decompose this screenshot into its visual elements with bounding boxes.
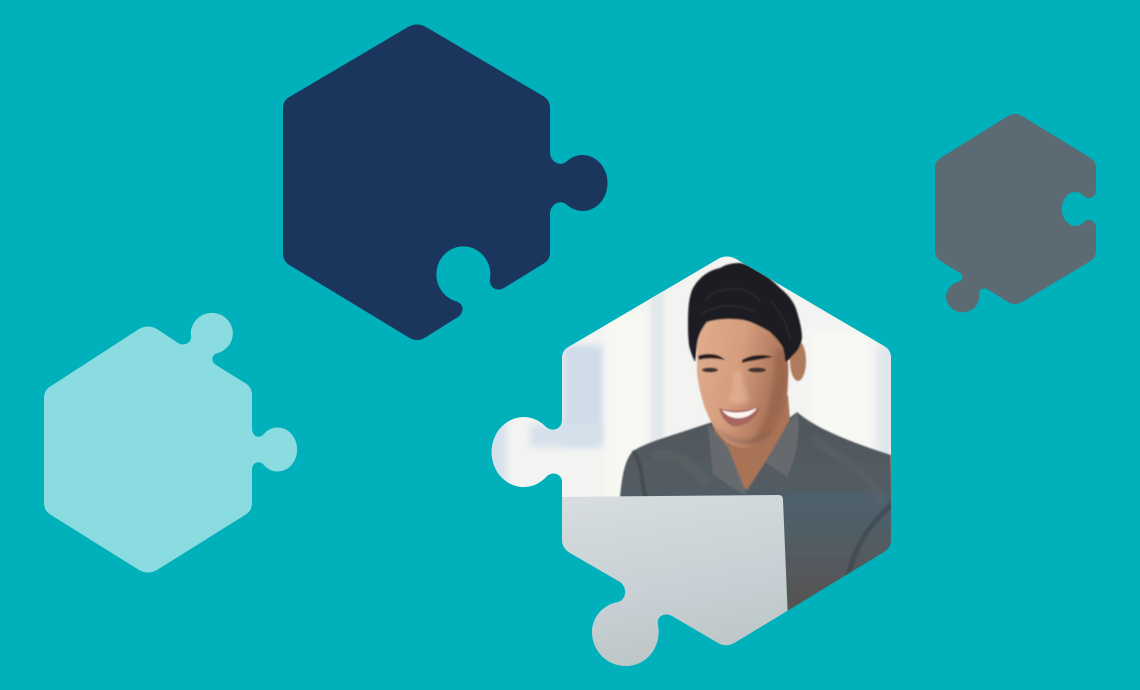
laptop: [562, 495, 788, 666]
face: [697, 319, 788, 448]
man: [620, 263, 895, 615]
photo background: bright office windows: [492, 256, 891, 497]
neck: [711, 395, 790, 490]
puzzle piece: slate grey hexagon: [935, 114, 1096, 312]
shirt folds and sleeve crease: [634, 440, 891, 575]
ear: [790, 341, 806, 381]
hair: [688, 263, 802, 362]
shirt: [620, 412, 895, 615]
mouth: [719, 407, 760, 426]
puzzle piece: pale aqua hexagon: [44, 313, 297, 572]
puzzle piece: navy hexagon: [283, 24, 608, 340]
shirt collar and placket: [708, 412, 799, 495]
nose shadow and cheek shading: [713, 350, 786, 447]
eyebrows and eyes: [698, 354, 773, 372]
hair highlights: [700, 289, 790, 340]
puzzle piece: photo of smiling man at laptop: [480, 250, 900, 680]
